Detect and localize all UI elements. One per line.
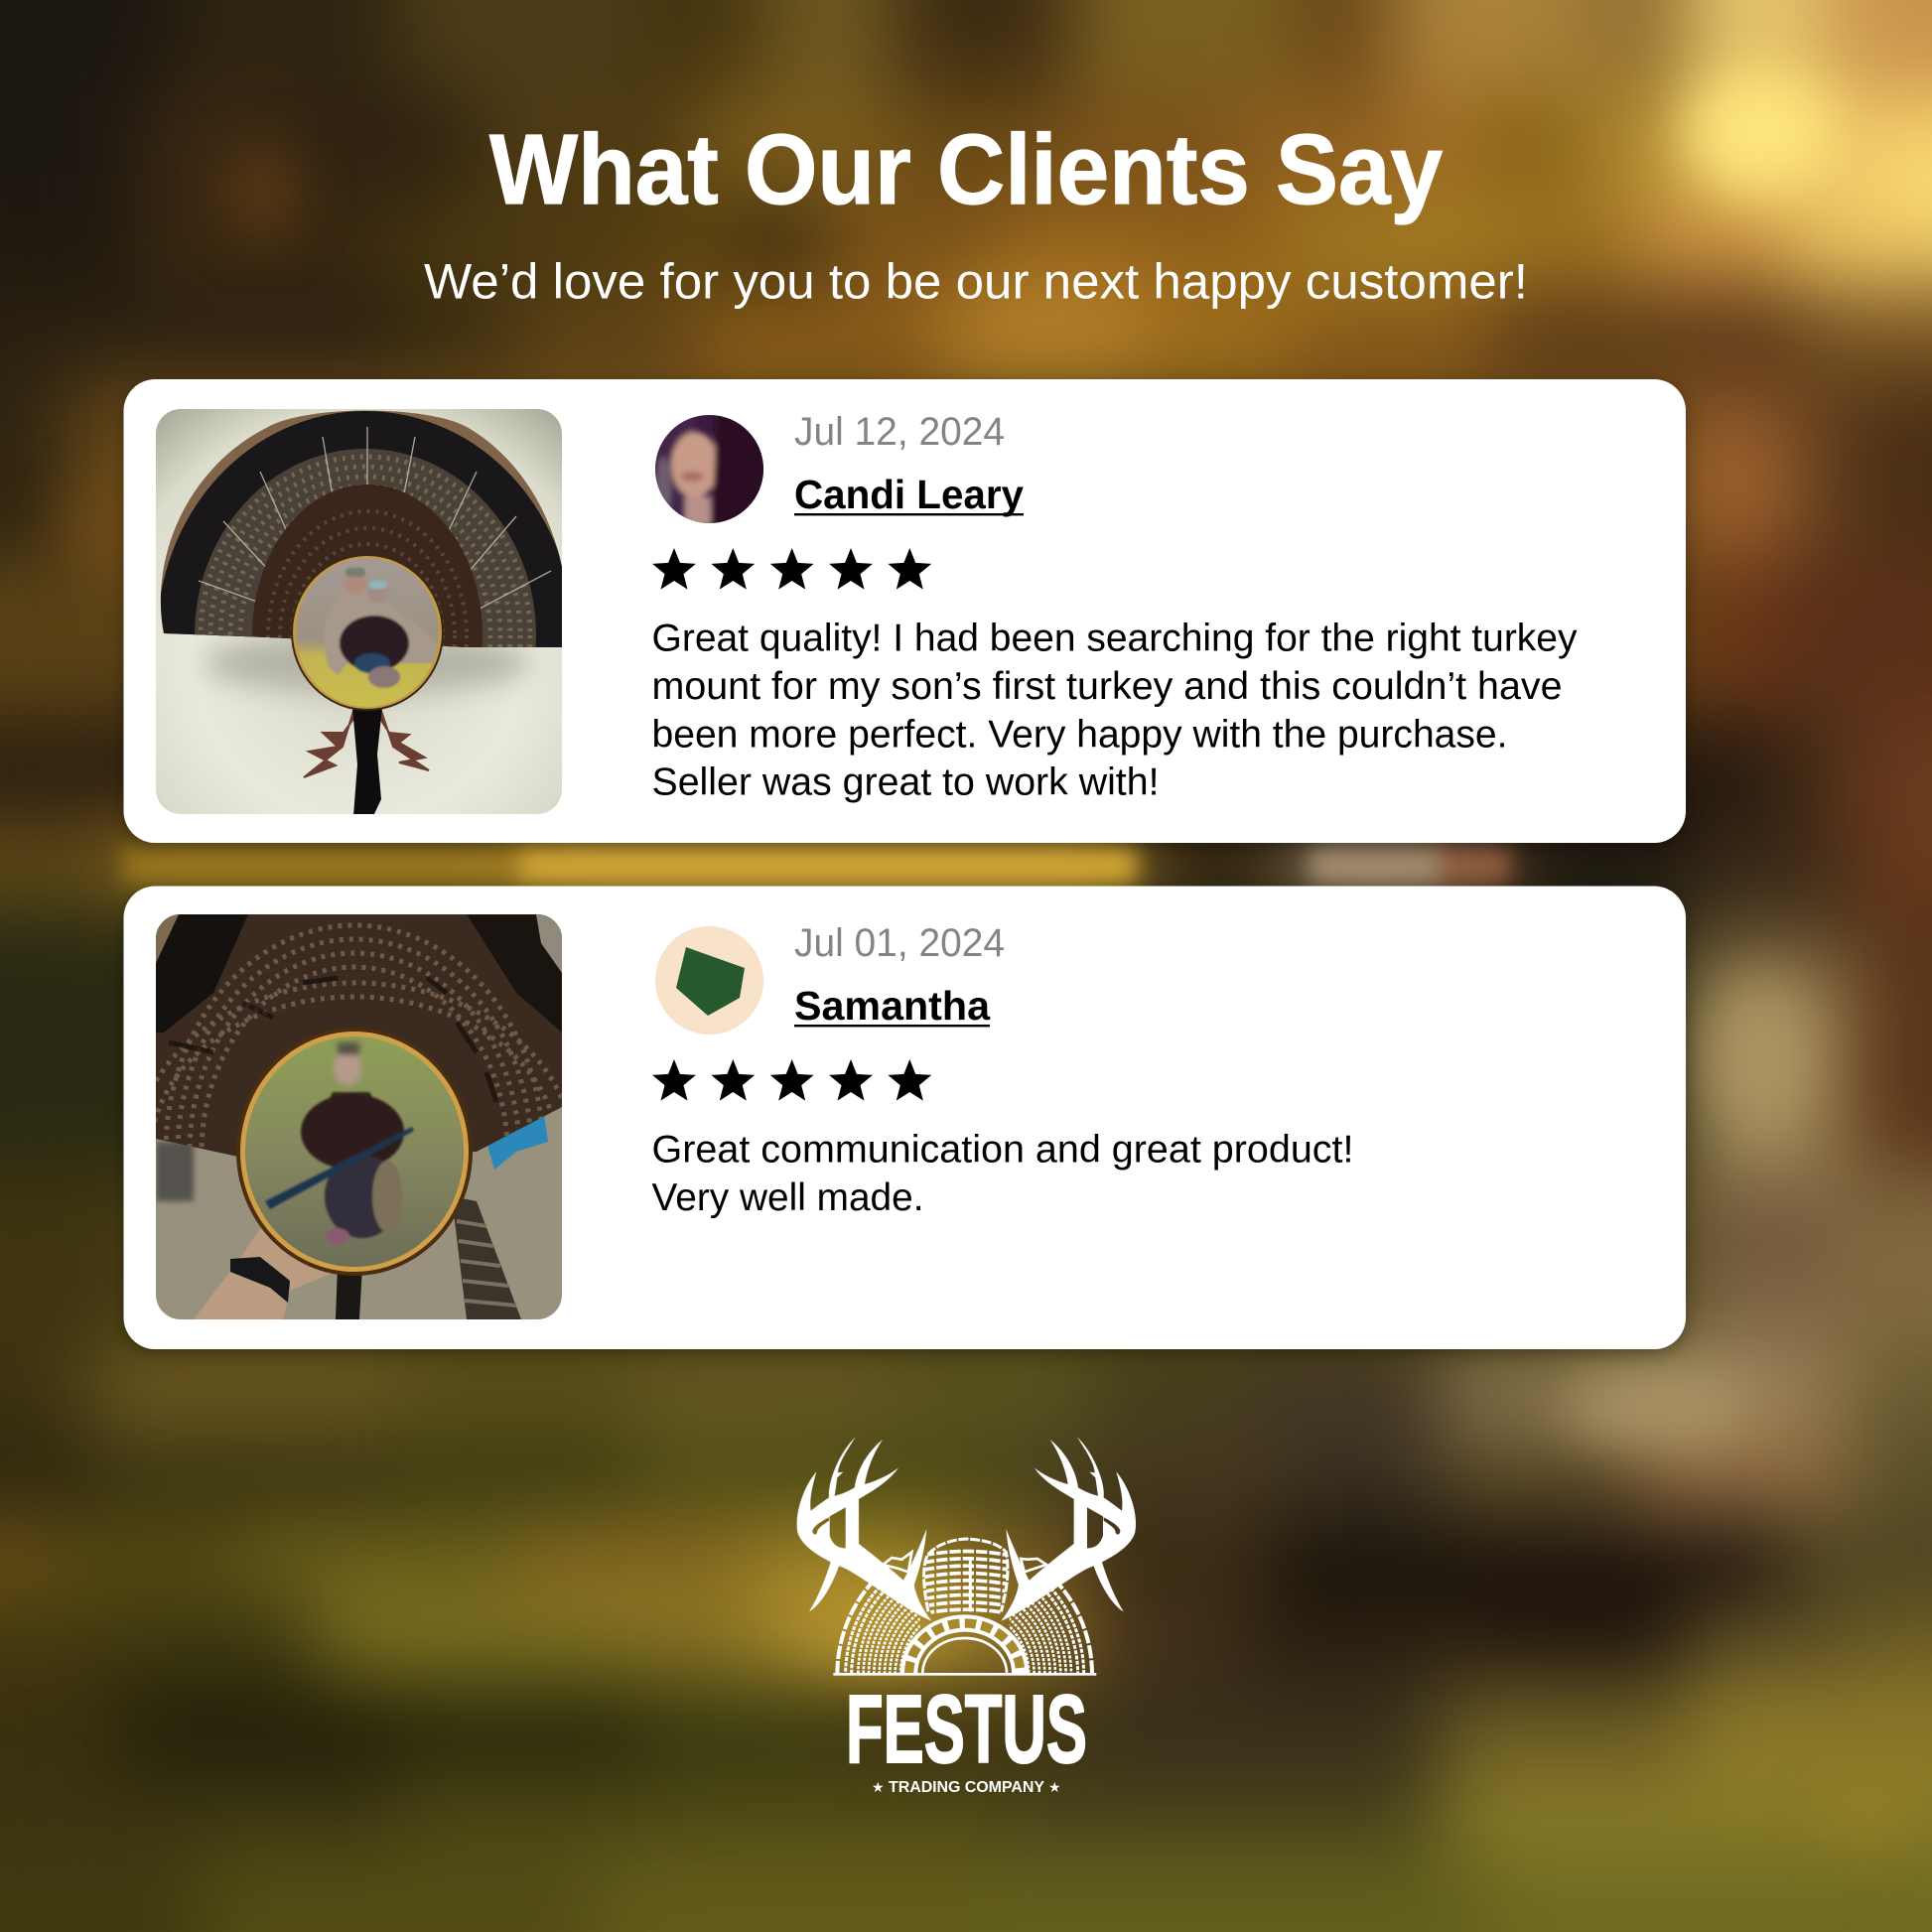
logo emblem: antlers over tree rings xyxy=(797,1437,1136,1809)
hand and watch xyxy=(194,1229,332,1319)
logo tagline: ★ xyxy=(872,1779,885,1795)
drain grate xyxy=(452,1196,521,1319)
review text: Great communication and great product! xyxy=(651,1128,1354,1172)
subtitle: We’d love for you to be our next happy customer! xyxy=(424,254,1528,310)
review text: Great quality! I had been searching for the right turkey xyxy=(651,618,1578,659)
logo wordmark: FESTUS xyxy=(846,1675,1087,1783)
avatar: Candi Leary xyxy=(655,415,769,526)
logo tagline: TRADING COMPANY xyxy=(889,1779,1044,1796)
reviewer name: Candi Leary xyxy=(794,472,1024,517)
review text: Very well made. xyxy=(651,1176,923,1219)
logo: Festus Trading Company xyxy=(797,1437,1136,1809)
photo: hand holding turkey fan mount xyxy=(156,914,562,1319)
logo tagline: ★ xyxy=(1048,1779,1061,1795)
review text: mount for my son’s first turkey and this couldn’t have xyxy=(651,665,1563,708)
feather fan xyxy=(156,914,562,1156)
right antler xyxy=(1001,1437,1136,1621)
avatar: Samantha xyxy=(655,926,763,1035)
date: Jul 12, 2024 xyxy=(794,410,1005,454)
reviewer name: Samantha xyxy=(794,983,991,1029)
blue tarp xyxy=(486,1114,548,1170)
five star rating xyxy=(652,548,931,590)
review text: been more perfect. Very happy with the purchase. xyxy=(651,713,1507,757)
panel: review card 2 xyxy=(123,886,1686,1378)
wood slice with hunter photo xyxy=(236,1028,473,1276)
card 1 background xyxy=(123,379,1686,843)
five star rating xyxy=(652,1059,931,1101)
beard xyxy=(336,1275,361,1319)
photo: turkey fan mount on wall xyxy=(156,409,562,814)
tree ring half disc xyxy=(837,1539,1092,1809)
review text xyxy=(651,1128,1354,1219)
left antler xyxy=(797,1437,931,1621)
title: What Our Clients Say xyxy=(489,114,1443,225)
review text: Seller was great to work with! xyxy=(651,760,1160,804)
card 2 background xyxy=(123,886,1686,1349)
panel: review card 1 xyxy=(123,379,1686,864)
turkey feet and beard xyxy=(304,707,429,816)
review text xyxy=(651,618,1578,804)
date: Jul 01, 2024 xyxy=(794,921,1005,965)
wood slice with hunter photo xyxy=(291,554,444,711)
